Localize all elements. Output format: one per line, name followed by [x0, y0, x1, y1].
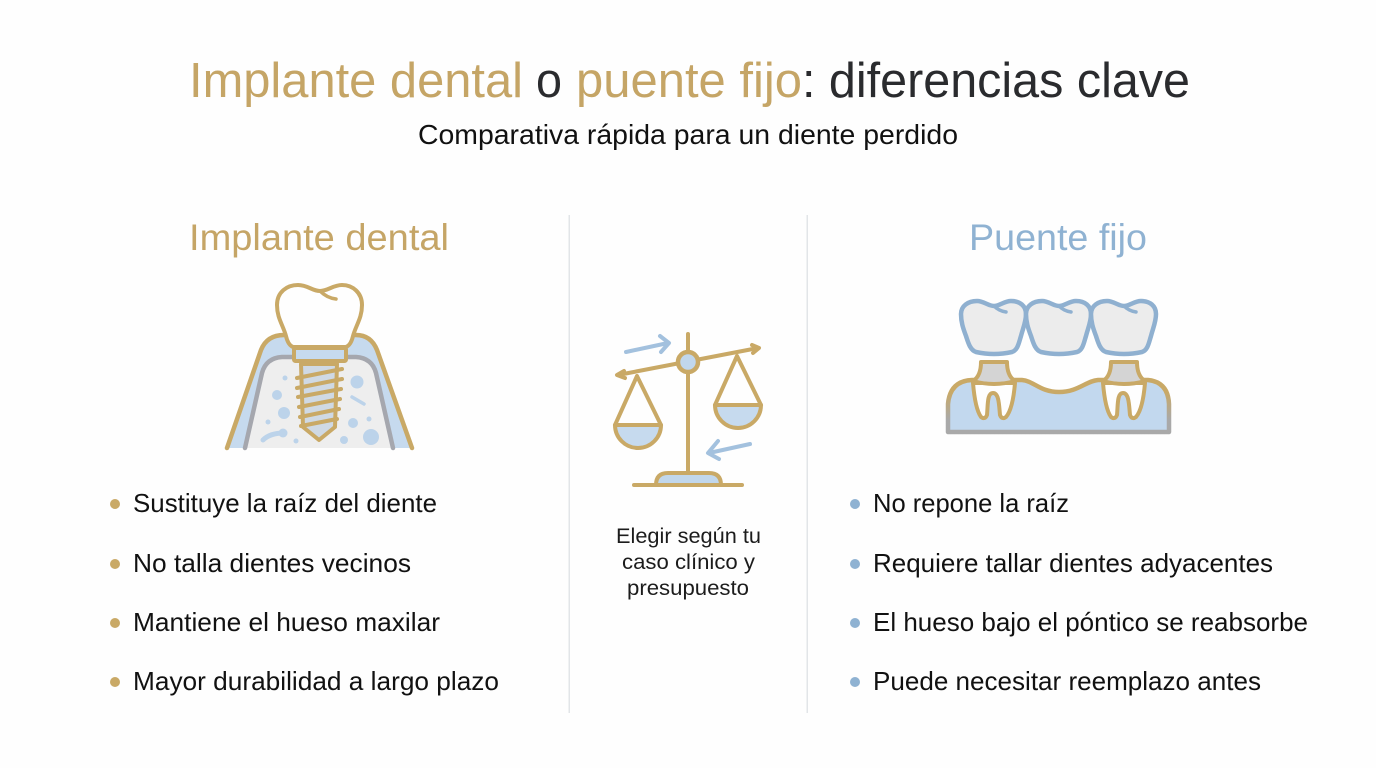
arrow: lower blue — [708, 441, 750, 459]
list: puente: Puede necesitar reemplazo antes — [873, 666, 1261, 696]
crown fissure — [320, 291, 336, 299]
bridge crowns — [961, 301, 1156, 354]
title: : diferencias clave — [802, 53, 1190, 108]
list: implante: Mayor durabilidad a largo plazo — [133, 666, 499, 696]
list: puente: El hueso bajo el póntico se reabsorbe — [873, 607, 1308, 637]
bone outline — [245, 357, 393, 448]
abutment — [294, 348, 346, 361]
title: Implante dental — [189, 53, 523, 108]
list: puente: No repone la raíz — [873, 488, 1069, 518]
divider: left — [568, 215, 570, 713]
title — [189, 53, 1190, 108]
list: implante: No talla dientes vecinos — [133, 548, 411, 578]
subtitle: Comparativa rápida para un diente perdido — [418, 119, 958, 150]
implant screw — [297, 364, 342, 440]
beam — [618, 348, 758, 375]
caption: presupuesto — [627, 576, 749, 600]
left abutment tooth — [973, 362, 1015, 418]
caption: Elegir según tu — [616, 524, 761, 548]
arrow: upper blue — [626, 336, 669, 352]
left pan — [615, 376, 661, 448]
gum — [948, 380, 1169, 432]
list: implante: Mantiene el hueso maxilar — [133, 607, 440, 637]
gum outline — [227, 335, 412, 448]
title: o — [536, 53, 562, 108]
base — [634, 473, 742, 485]
icon: dental bridge — [948, 301, 1169, 432]
bone — [245, 357, 393, 448]
list: implante: Sustituye la raíz del diente — [133, 488, 437, 518]
icon: dental implant — [227, 285, 412, 448]
heading: implante dental: Implante dental — [189, 217, 449, 258]
post — [686, 334, 690, 474]
crown — [277, 285, 362, 347]
icon: balance scale — [615, 334, 761, 485]
heading: puente fijo: Puente fijo — [969, 217, 1147, 258]
list: implante — [110, 488, 499, 696]
gum — [227, 335, 412, 448]
divider: right — [806, 215, 808, 713]
caption: caso clínico y — [622, 550, 755, 574]
list: puente — [850, 488, 1308, 696]
pivot — [678, 352, 698, 372]
panel: center comparison — [615, 334, 761, 600]
panel: puente fijo — [850, 217, 1308, 696]
right pan — [715, 356, 761, 428]
list: puente: Requiere tallar dientes adyacentes — [873, 548, 1273, 578]
title: puente fijo — [576, 53, 802, 108]
bone particles — [263, 376, 379, 445]
beam arrowheads — [617, 345, 759, 378]
caption — [616, 524, 761, 600]
right abutment tooth — [1103, 362, 1145, 418]
panel: implante dental — [110, 217, 499, 696]
